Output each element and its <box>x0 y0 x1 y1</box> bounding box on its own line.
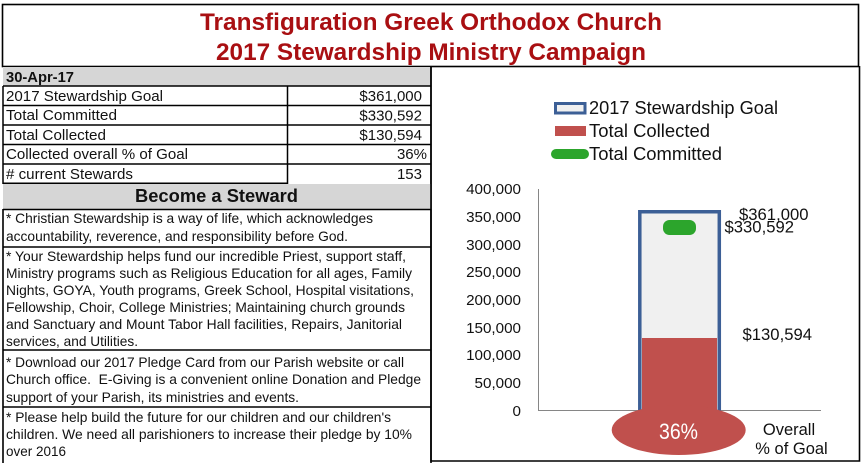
text block: what Stewardship funds: Fellowship, Choir, College Ministries; Maintaining church grounds <box>6 299 405 315</box>
text block: future for children: over 2016 <box>6 443 66 459</box>
text block: pledge card: Church office. E-Giving is a convenient online Donation and Pledge <box>6 371 421 387</box>
table rows: Total Collected <box>6 127 106 144</box>
heading: Become a Steward <box>3 184 431 209</box>
table rows <box>3 66 431 209</box>
text block: what Stewardship funds: services, and Utilities. <box>6 333 138 349</box>
text block: Christian Stewardship <box>6 210 373 244</box>
thermometer bulb with percentage <box>612 405 746 455</box>
text block: future for children: * Please help build the future for our children and our children's <box>6 409 391 425</box>
table rows: 36% <box>397 146 427 163</box>
legend item: Total Collected: Total Collected <box>589 121 710 141</box>
thermometer bulb with percentage: 36% <box>659 419 698 444</box>
text block: pledge card <box>6 354 421 405</box>
title banner <box>2 4 858 66</box>
text block: future for children <box>6 409 412 459</box>
table rows: $330,592 <box>359 108 422 124</box>
table rows: Total Committed <box>6 107 117 124</box>
text block: what Stewardship funds: and Sanctuary and Mount Tabor Hall facilities, Repairs, Janitorial <box>6 316 402 332</box>
caption: overall percent of goal <box>755 421 828 458</box>
date header row <box>3 67 431 86</box>
y axis labels: 150,000 <box>466 320 521 337</box>
text block: pledge card: * Download our 2017 Pledge Card from our Parish website or call <box>6 354 404 370</box>
y axis labels: 50,000 <box>475 375 521 392</box>
text block: future for children: children. We need all parishioners to increase their pledge by 10% <box>6 426 412 442</box>
text block: Christian Stewardship: * Christian Stewardship is a way of life, which acknowledges <box>6 210 373 226</box>
table rows: 2017 Stewardship Goal <box>6 88 163 105</box>
chart legend <box>551 98 778 164</box>
text block: pledge card: support of your Parish, its ministries and events. <box>6 389 299 405</box>
goal bar outline <box>640 212 719 411</box>
panel: steward information text <box>3 209 431 463</box>
legend item: 2017 Stewardship Goal: 2017 Stewardship Goal <box>589 98 778 118</box>
date header row: 30-Apr-17 <box>6 70 74 86</box>
text block: what Stewardship funds <box>6 248 414 349</box>
table rows: 153 <box>397 166 422 183</box>
caption: overall percent of goal: Overall <box>763 421 815 439</box>
text block: what Stewardship funds: * Your Stewardship helps fund our incredible Priest, support staff, <box>6 248 406 264</box>
text block: what Stewardship funds: Ministry programs such as Religious Education for all ages, Family <box>6 265 412 281</box>
data label: collected: $130,594 <box>742 325 812 344</box>
title banner: Transfiguration Greek Orthodox Church <box>200 9 662 36</box>
y axis labels: 100,000 <box>466 347 521 364</box>
table rows: # current Stewards <box>6 166 133 183</box>
committed marker <box>663 220 696 235</box>
panel: campaign summary table <box>3 66 431 209</box>
heading: Become a Steward: Become a Steward <box>135 185 298 206</box>
y axis labels <box>466 181 521 420</box>
data label: goal: $361,000 <box>739 205 808 224</box>
title banner: 2017 Stewardship Ministry Campaign <box>216 39 646 66</box>
text block: what Stewardship funds: Nights, GOYA, Youth programs, Greek School, Hospital visitations, <box>6 282 414 298</box>
text block: Christian Stewardship: accountability, reverence, and responsibility before God. <box>6 228 348 244</box>
table rows: $361,000 <box>359 88 422 105</box>
y axis labels: 300,000 <box>466 237 521 254</box>
collected bar <box>642 338 717 414</box>
panel: thermometer chart <box>431 66 860 461</box>
axis lines <box>538 189 821 410</box>
legend item: Total Committed: Total Committed <box>589 144 722 164</box>
data label: committed: $330,592 <box>724 218 794 236</box>
table rows: Collected overall % of Goal <box>6 146 188 163</box>
caption: overall percent of goal: % of Goal <box>755 440 828 458</box>
y axis labels: 400,000 <box>466 181 521 198</box>
y axis labels: 350,000 <box>466 209 521 226</box>
table rows: $130,594 <box>359 127 422 144</box>
y axis labels: 200,000 <box>466 292 521 309</box>
y axis labels: 250,000 <box>466 264 521 281</box>
y axis labels: 0 <box>513 403 521 420</box>
